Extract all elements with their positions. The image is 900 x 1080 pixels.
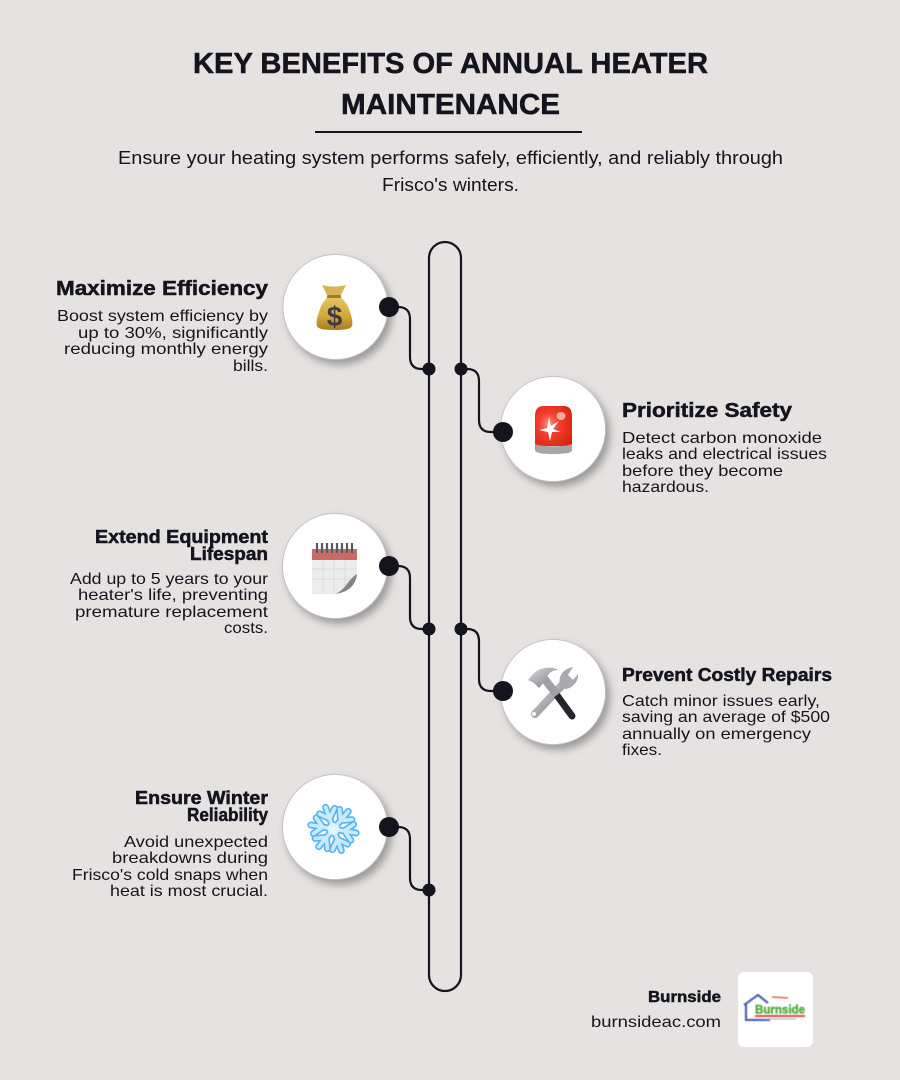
icon: hammer and wrench xyxy=(528,667,578,716)
connector xyxy=(389,827,429,890)
connector xyxy=(389,307,429,369)
icon: siren xyxy=(535,406,572,454)
icon circle xyxy=(282,514,388,618)
body text: heater's life, preventing xyxy=(78,587,268,604)
subtitle xyxy=(118,148,783,195)
body text: annually on emergency xyxy=(622,726,811,743)
body text: hazardous. xyxy=(622,479,709,496)
body text: up to 30%, significantly xyxy=(78,325,268,342)
body text: Avoid unexpected xyxy=(124,834,268,851)
heading: Maximize Efficiency xyxy=(56,278,269,300)
body text: premature replacement xyxy=(75,604,269,621)
heading: Lifespan xyxy=(190,544,268,564)
heading xyxy=(135,788,268,825)
junction xyxy=(422,884,436,896)
node xyxy=(379,817,399,837)
node xyxy=(379,556,399,576)
body text: before they become xyxy=(622,463,783,480)
body text: Catch minor issues early, xyxy=(622,693,820,710)
body text: heat is most crucial. xyxy=(110,883,268,900)
subtitle: Frisco's winters. xyxy=(382,175,519,195)
heading: Reliability xyxy=(187,805,268,825)
panel: extend equipment lifespan xyxy=(70,514,436,637)
junction xyxy=(454,622,468,636)
body text: Add up to 5 years to your xyxy=(70,571,269,588)
body text: Boost system efficiency by xyxy=(57,308,268,325)
body text: leaks and electrical issues xyxy=(622,446,827,463)
body text xyxy=(622,693,830,759)
body text: breakdowns during xyxy=(112,850,268,867)
footer brand xyxy=(591,989,721,1031)
icon circle xyxy=(500,376,606,482)
junction xyxy=(422,362,436,376)
body text: bills. xyxy=(233,358,268,375)
logo: Burnside xyxy=(755,1004,805,1016)
body text: costs. xyxy=(224,620,268,637)
body text xyxy=(72,834,268,900)
node xyxy=(493,422,513,442)
footer brand: burnsideac.com xyxy=(591,1014,721,1031)
panel: prioritize safety xyxy=(454,362,827,496)
title: KEY BENEFITS OF ANNUAL HEATER xyxy=(193,48,708,80)
icon circle xyxy=(500,640,606,744)
heading: Prevent Costly Repairs xyxy=(622,665,832,685)
icon circle xyxy=(282,774,388,880)
title: MAINTENANCE xyxy=(341,89,560,121)
icon: money bag xyxy=(317,285,352,332)
icon: calendar xyxy=(312,543,357,594)
body text: Frisco's cold snaps when xyxy=(72,867,268,884)
panel: ensure winter reliability xyxy=(72,774,436,900)
heading: Prioritize Safety xyxy=(622,400,793,422)
junction xyxy=(422,622,436,636)
panel: maximize efficiency xyxy=(56,254,436,376)
icon: snowflake xyxy=(303,799,364,859)
connector xyxy=(389,566,429,629)
logo xyxy=(738,972,813,1047)
heading: Ensure Winter xyxy=(135,788,268,808)
icon circle xyxy=(283,254,388,360)
body text: Detect carbon monoxide xyxy=(622,430,822,447)
body text xyxy=(622,430,827,496)
body text: saving an average of $500 xyxy=(622,709,830,726)
connector xyxy=(461,369,503,432)
body text xyxy=(57,308,268,375)
body text xyxy=(70,571,269,637)
connector xyxy=(461,629,503,691)
body text: reducing monthly energy xyxy=(64,341,268,358)
junction xyxy=(454,362,468,376)
timeline track xyxy=(429,242,461,991)
heading: Extend Equipment xyxy=(95,527,268,547)
body text: fixes. xyxy=(622,742,662,759)
panel: prevent costly repairs xyxy=(454,622,832,759)
node xyxy=(493,681,513,701)
icon: money bag: $ xyxy=(327,301,343,332)
node xyxy=(379,297,399,317)
heading xyxy=(95,527,268,564)
title xyxy=(193,48,708,121)
subtitle: Ensure your heating system performs safely, efficiently, and reliably through xyxy=(118,148,783,168)
footer brand: Burnside xyxy=(648,989,721,1006)
